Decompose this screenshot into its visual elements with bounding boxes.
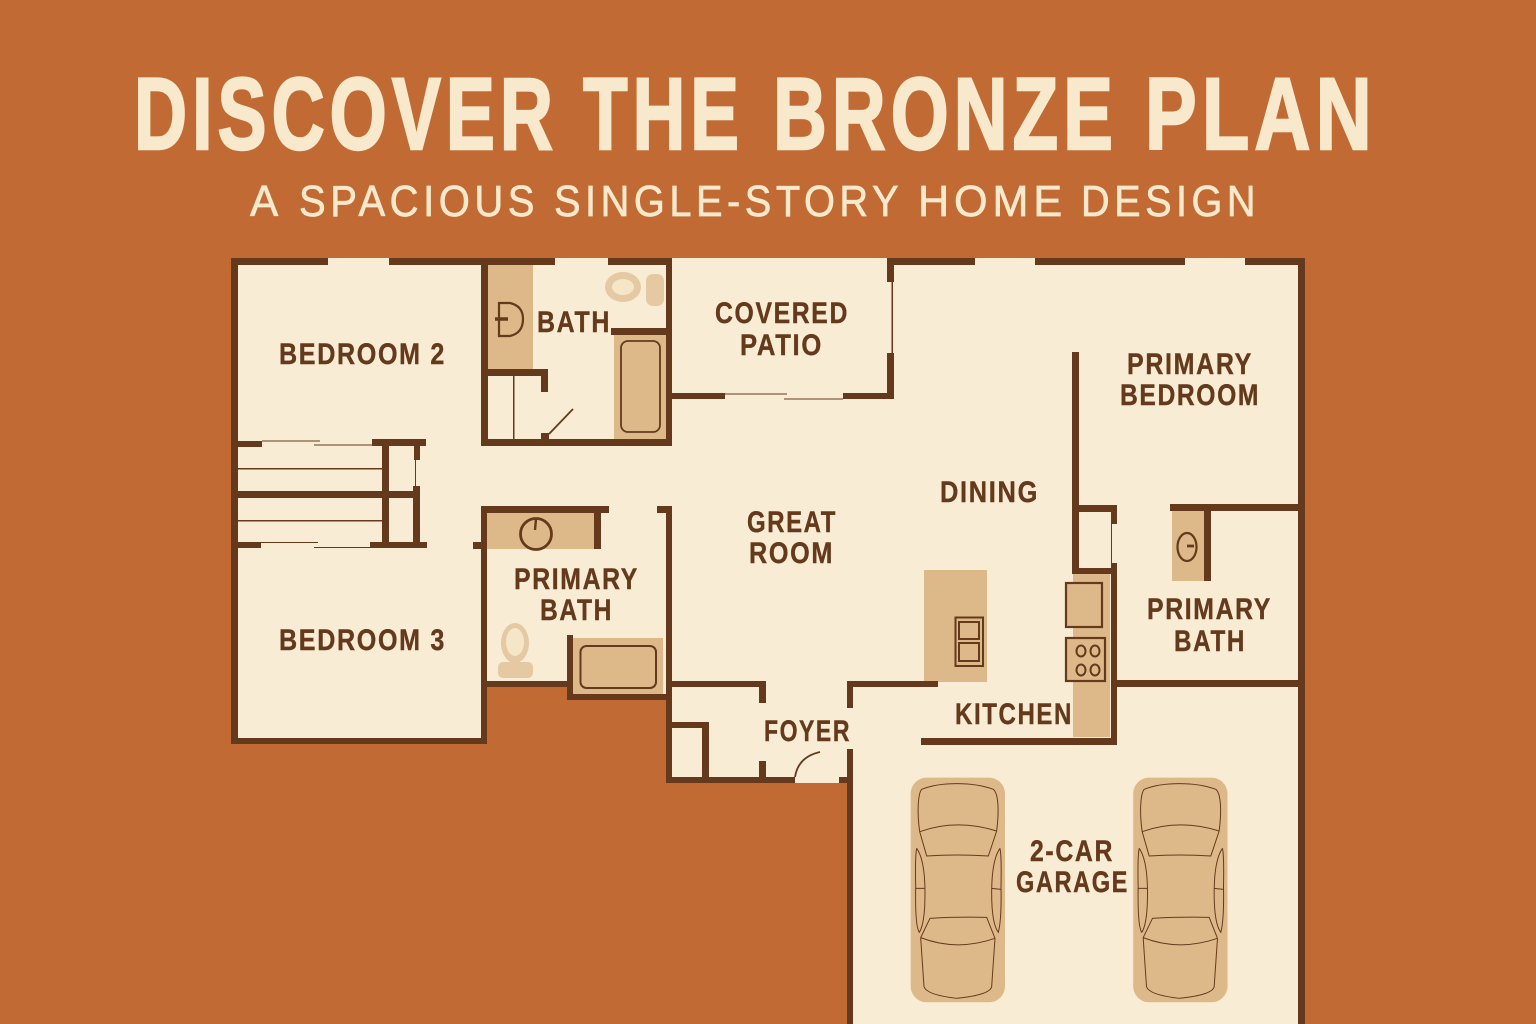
- windows: [328, 258, 1245, 263]
- label: 2-car garage: 2-CAR: [1030, 835, 1114, 868]
- label: primary bath right: PRIMARY: [1147, 593, 1272, 626]
- subtitle: A: [250, 177, 283, 226]
- icon: foyer door arc: [795, 752, 820, 777]
- label: primary bath left: [514, 563, 639, 627]
- icon: primary suite sink: [1178, 533, 1196, 561]
- icon: bath tub: [621, 341, 660, 432]
- label: primary bedroom: BEDROOM: [1120, 379, 1260, 412]
- icon: island double sink: [956, 618, 983, 666]
- label: dining: DINING: [940, 476, 1039, 509]
- label: primary bath right: [1147, 593, 1272, 658]
- label: foyer: FOYER: [764, 715, 851, 748]
- label: primary bath left: PRIMARY: [514, 563, 639, 596]
- label: primary bath right: BATH: [1174, 625, 1246, 658]
- icon: primary bath tub: [580, 646, 656, 688]
- label: bedroom 2: BEDROOM 2: [279, 338, 446, 371]
- walls: [231, 258, 1305, 1024]
- label: great room: ROOM: [749, 537, 834, 570]
- label: bath: BATH: [537, 306, 611, 339]
- icon: bath toilet: [605, 272, 664, 306]
- icon: stove: [1066, 638, 1105, 681]
- label: kitchen: KITCHEN: [955, 698, 1073, 731]
- icon: closet door swing: [549, 409, 573, 434]
- label: bedroom 3: BEDROOM 3: [279, 624, 446, 657]
- subtitle: [250, 177, 1260, 226]
- icon: primary bath sink: [520, 518, 552, 550]
- title: THE: [583, 57, 744, 171]
- subtitle: SPACIOUS: [299, 177, 539, 226]
- label: primary bedroom: PRIMARY: [1127, 348, 1253, 381]
- label: primary bedroom: [1120, 348, 1260, 412]
- label: great room: [747, 506, 837, 570]
- subtitle: SINGLE-STORY: [554, 177, 903, 226]
- icon: kitchen sink: [1066, 583, 1102, 627]
- label: 2-car garage: [1016, 835, 1129, 899]
- floor plan: [231, 258, 1305, 1024]
- label: covered patio: [715, 297, 849, 362]
- title: [134, 57, 1377, 171]
- fixture fills: vanities, tubs and counters: [487, 265, 1204, 737]
- icon: left car: [911, 778, 1005, 1002]
- room labels: [279, 297, 1272, 899]
- label: covered patio: COVERED: [715, 297, 849, 330]
- title: DISCOVER: [134, 57, 558, 171]
- title: PLAN: [1145, 57, 1377, 171]
- subtitle: HOME: [918, 177, 1067, 226]
- label: covered patio: PATIO: [740, 329, 823, 362]
- icon: bath sink: [495, 303, 523, 336]
- icon: primary bath toilet: [498, 623, 533, 678]
- title: BRONZE: [773, 57, 1118, 171]
- subtitle: DESIGN: [1081, 177, 1260, 226]
- label: 2-car garage: GARAGE: [1016, 866, 1129, 899]
- label: primary bath left: BATH: [540, 594, 613, 627]
- label: great room: GREAT: [747, 506, 837, 539]
- floor area: [232, 258, 1305, 1024]
- icon: right car: [1133, 778, 1227, 1002]
